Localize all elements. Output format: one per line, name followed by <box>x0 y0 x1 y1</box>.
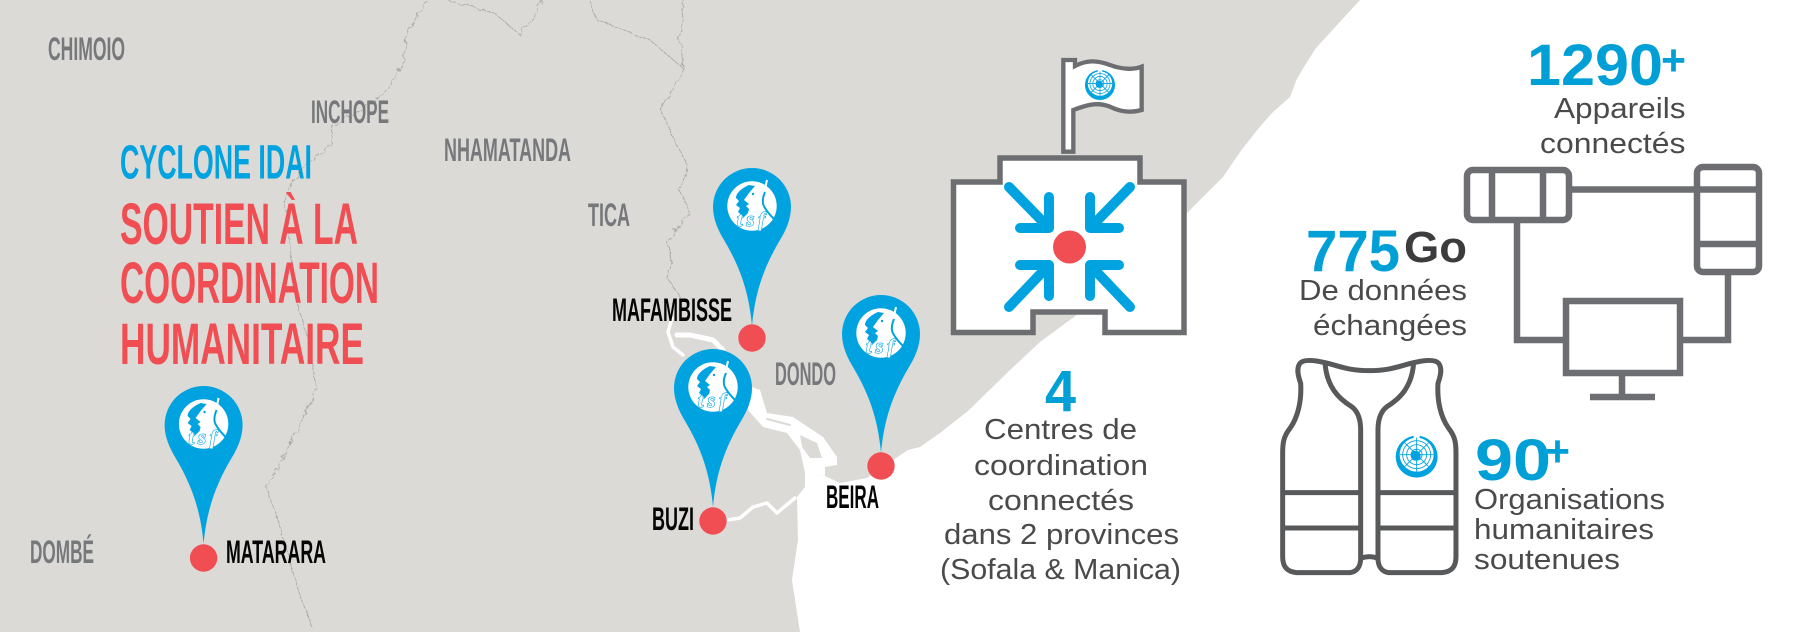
place labels: coordination sites <box>226 292 879 570</box>
stat: 4 coordination centres: (Sofala & Manica) <box>940 554 1181 586</box>
place labels: grey towns: INCHOPE <box>311 94 389 130</box>
pin: Beira: tsf <box>866 336 896 358</box>
place labels: grey towns: TICA <box>588 197 630 233</box>
place labels: grey towns: CHIMOIO <box>48 31 125 67</box>
stat: 90+ humanitarian organisations: Organisations <box>1474 484 1665 516</box>
stat: 4 coordination centres: Centres de <box>984 414 1137 446</box>
stat: 90+ humanitarian organisations: + <box>1545 427 1570 476</box>
icon: converging arrows <box>1009 187 1130 307</box>
stat: 775 Go exchanged: échangées <box>1313 310 1467 342</box>
title: cyclone idai: CYCLONE IDAI <box>120 136 312 190</box>
place labels: coordination sites: MATARARA <box>226 534 326 570</box>
stat: 90+ humanitarian organisations: humanitaires <box>1474 514 1654 546</box>
stat: 4 coordination centres <box>940 359 1181 586</box>
pin: Matarara: tsf <box>189 427 219 449</box>
stat: 1290+ connected devices: 1290 <box>1527 33 1663 98</box>
map: province borders <box>267 0 690 629</box>
icon: coordination centre building <box>954 158 1184 332</box>
stat: 775 Go exchanged <box>1299 219 1467 342</box>
stat: 4 coordination centres: dans 2 provinces <box>944 519 1179 551</box>
place labels: coordination sites: BEIRA <box>826 479 879 515</box>
heading: soutien à la coordination humanitaire <box>120 192 379 377</box>
map: rivers <box>668 318 837 520</box>
place labels: grey towns <box>30 31 836 570</box>
place labels: grey towns: NHAMATANDA <box>444 132 571 168</box>
place labels: coordination sites: MAFAMBISSE <box>612 292 732 328</box>
place labels: grey towns: DOMBÉ <box>30 534 94 570</box>
stat: 775 Go exchanged: Go <box>1404 223 1467 272</box>
stat: 1290+ connected devices: Appareils <box>1554 93 1686 125</box>
heading: soutien à la coordination humanitaire: SOUTIEN À LA <box>120 192 358 257</box>
pin: Mafambisse: tsf <box>737 209 767 231</box>
pin: Matarara <box>165 386 243 572</box>
icon: UN flag <box>1063 60 1142 152</box>
pin: Buzi: tsf <box>698 390 728 412</box>
stat: 775 Go exchanged: De données <box>1299 275 1467 307</box>
map: land mass with coastline <box>0 0 1360 632</box>
stat: 775 Go exchanged: 775 <box>1306 219 1400 284</box>
place labels: coordination sites: BUZI <box>652 501 694 537</box>
icon: connected devices network <box>1467 167 1759 397</box>
place labels: grey towns: DONDO <box>775 356 836 392</box>
heading: soutien à la coordination humanitaire: COORDINATION <box>120 251 379 316</box>
stat: 1290+ connected devices: + <box>1661 36 1686 85</box>
stat: 4 coordination centres: 4 <box>1045 359 1076 424</box>
pin: Mafambisse <box>713 168 791 352</box>
stat: 4 coordination centres: connectés <box>988 485 1134 517</box>
stat: 90+ humanitarian organisations: soutenues <box>1474 544 1620 576</box>
icon: humanitarian vest with UN emblem <box>1283 360 1456 573</box>
stat: 1290+ connected devices <box>1527 33 1686 160</box>
stat: 1290+ connected devices: connectés <box>1540 128 1686 160</box>
stat: 4 coordination centres: coordination <box>974 450 1148 482</box>
pin: Buzi <box>674 349 752 535</box>
heading: soutien à la coordination humanitaire: HUMANITAIRE <box>120 312 364 377</box>
stat: 90+ humanitarian organisations <box>1474 427 1665 576</box>
stat: 90+ humanitarian organisations: 90 <box>1475 428 1551 493</box>
pin: Beira <box>842 295 920 480</box>
